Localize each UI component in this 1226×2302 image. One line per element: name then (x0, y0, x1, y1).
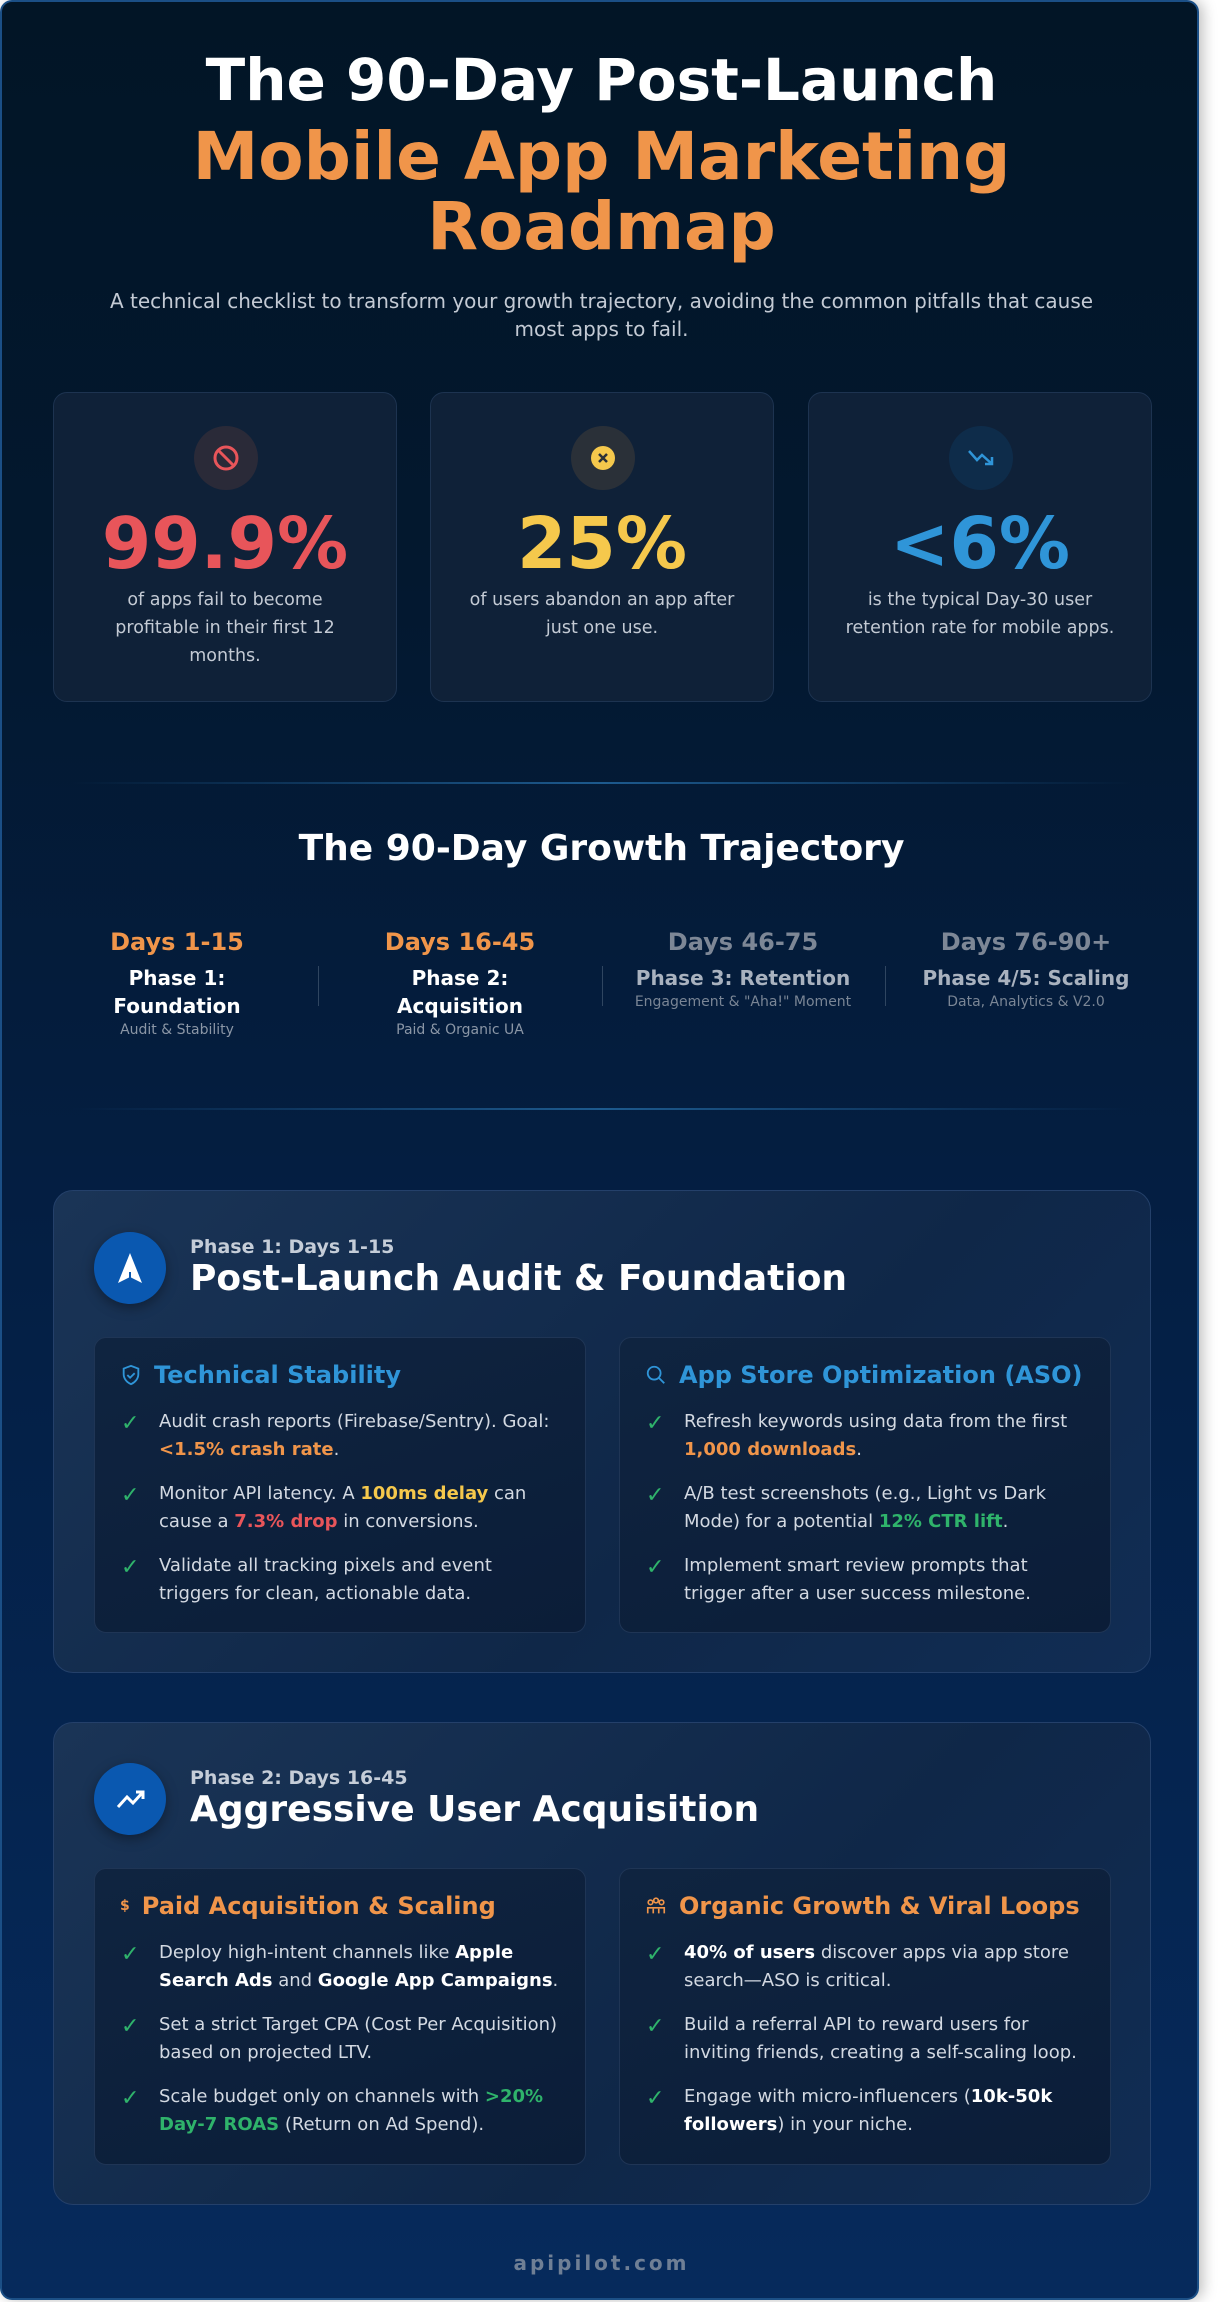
stat card: <6% (808, 392, 1152, 702)
card: organic growth: 40% of users discover apps via app store search—ASO is critical. (684, 1942, 1069, 1991)
phase 2: Phase 2: (412, 966, 508, 990)
footer: apipilot.com (513, 2251, 690, 2275)
phase 4/5 (923, 928, 1129, 1010)
card: paid acquisition (94, 1868, 586, 2165)
phase 4/5: Phase 4/5: Scaling (923, 966, 1129, 990)
phase 3: Engagement & "Aha!" Moment (635, 994, 851, 1010)
subtitle: A technical checklist to transform your growth trajectory, avoiding the common pitfalls that cause most apps to fail. (110, 289, 1093, 341)
phase 3 (635, 928, 851, 1010)
panel: phase 1 (53, 1190, 1151, 1673)
card: technical stability: Audit crash reports (Firebase/Sentry). Goal: <1.5% crash rate. (159, 1411, 550, 1460)
card: ASO (619, 1337, 1111, 1633)
card: technical stability: Validate all tracking pixels and event triggers for clean, actionable data. (159, 1555, 492, 1604)
phase 2: Days 16-45 (385, 928, 535, 956)
phase 1: Foundation (113, 994, 241, 1018)
panel: phase 1: Phase 1: Days 1-15 (190, 1236, 394, 1258)
stat card: 25%: 25% (517, 502, 687, 585)
phase 4/5: Data, Analytics & V2.0 (947, 994, 1105, 1010)
panel title: Post-Launch Audit & Foundation (190, 1258, 847, 1299)
card: paid acquisition: $ (120, 1898, 130, 1914)
panel title: Aggressive User Acquisition (190, 1789, 759, 1830)
card: technical stability: Technical Stability (154, 1361, 401, 1389)
card: organic growth: Organic Growth & Viral Loops (679, 1892, 1080, 1920)
card: technical stability: Monitor API latency. A 100ms delay can cause a 7.3% drop in conversions. (159, 1483, 526, 1532)
stat card: 25% (430, 392, 774, 702)
card: ASO: Refresh keywords using data from the first 1,000 downloads. (684, 1411, 1067, 1460)
timeline phases (110, 928, 1129, 1038)
heading: growth trajectory: The 90-Day Growth Trajectory (299, 828, 904, 869)
card: paid acquisition: Scale budget only on channels with >20% Day-7 ROAS (Return on Ad Spend). (159, 2086, 543, 2135)
card: organic growth: Engage with micro-influencers (10k-50k followers) in your niche. (684, 2086, 1052, 2135)
title: Roadmap (427, 188, 776, 265)
icon: x circle (571, 426, 635, 490)
stat card: 99.9% (53, 392, 397, 702)
card: technical stability (94, 1337, 586, 1633)
title: Mobile App Marketing (193, 118, 1010, 195)
stat card: <6%: is the typical Day-30 user retention rate for mobile apps. (846, 590, 1114, 638)
phase 1: Days 1-15 (110, 928, 244, 956)
phase 3: Days 46-75 (668, 928, 818, 956)
phase 2 (385, 928, 535, 1038)
phase 2: Paid & Organic UA (396, 1022, 524, 1038)
phase 1: Audit & Stability (120, 1022, 234, 1038)
phase 3: Phase 3: Retention (636, 966, 850, 990)
card: ASO: Implement smart review prompts that trigger after a user success milestone. (684, 1555, 1031, 1604)
phase 2: Acquisition (397, 994, 523, 1018)
icon: rocket/arrow (94, 1232, 166, 1304)
card: paid acquisition: Deploy high-intent channels like Apple Search Ads and Google App Campaigns. (159, 1942, 558, 1991)
phase 1 (110, 928, 244, 1038)
card: ASO: A/B test screenshots (e.g., Light vs Dark Mode) for a potential 12% CTR lift. (684, 1483, 1046, 1532)
stat card: <6%: <6% (890, 502, 1070, 585)
card: organic growth (619, 1868, 1111, 2165)
title (193, 46, 1010, 265)
icon: trend down (949, 426, 1013, 490)
title: The 90-Day Post-Launch (206, 46, 997, 114)
card: organic growth: Build a referral API to reward users for inviting friends, creating a self-scaling loop. (684, 2014, 1077, 2063)
icon: prohibited (194, 426, 258, 490)
stat card: 25%: of users abandon an app after just one use. (470, 590, 734, 638)
icon: trend up (94, 1763, 166, 1835)
panel: phase 2 (53, 1722, 1151, 2205)
panel: phase 2: Phase 2: Days 16-45 (190, 1767, 408, 1789)
phase 1: Phase 1: (129, 966, 225, 990)
phase 4/5: Days 76-90+ (941, 928, 1111, 956)
stat card: 99.9%: 99.9% (102, 502, 348, 585)
card: paid acquisition: Set a strict Target CPA (Cost Per Acquisition) based on projected LTV. (159, 2014, 557, 2063)
card: paid acquisition: Paid Acquisition & Scaling (142, 1892, 496, 1920)
card: ASO: App Store Optimization (ASO) (679, 1361, 1083, 1389)
stat card: 99.9%: of apps fail to become profitable in their first 12 months. (115, 590, 335, 666)
